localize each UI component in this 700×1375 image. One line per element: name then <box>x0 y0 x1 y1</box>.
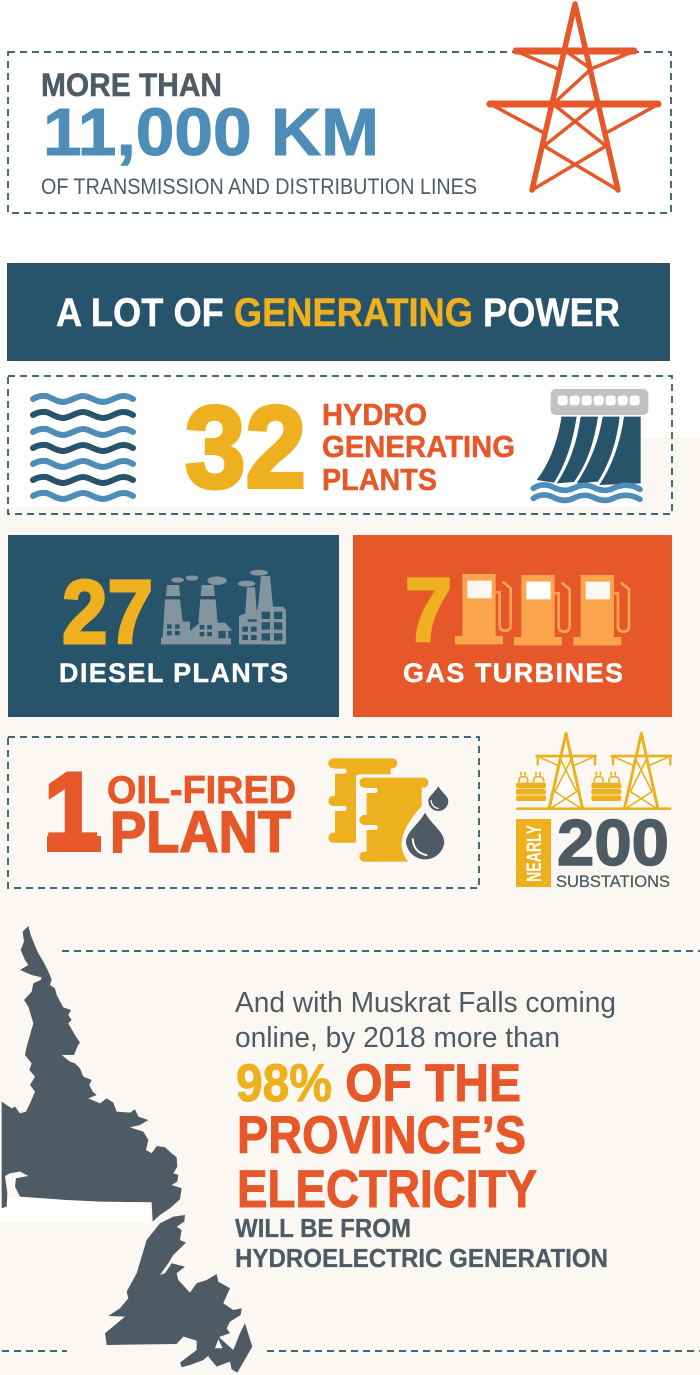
map: Newfoundland and Labrador <box>2 926 252 1373</box>
text: hydro generating plants: HYDRO <box>322 397 427 432</box>
number: 1: 1 <box>44 752 98 868</box>
panel: diesel plants <box>8 535 339 717</box>
text: hydro generating plants: GENERATING <box>322 429 515 464</box>
heading: generating power: A LOT OF GENERATING POWER <box>56 291 620 335</box>
headline: 98% of the province's electricity: PROVINCE’S <box>237 1106 526 1165</box>
icon: oil barrels and drops <box>328 758 448 862</box>
icon: fuel pumps <box>455 574 629 645</box>
tag: nearly: NEARLY <box>523 825 546 882</box>
text: and with Muskrat Falls coming online: online, by 2018 more than <box>235 1022 560 1054</box>
text: hydro generating plants <box>322 397 515 497</box>
panel: oil-fired plant <box>8 737 479 888</box>
label: gas turbines: GAS TURBINES <box>403 658 623 688</box>
text: will be from hydroelectric generation: HYDROELECTRIC GENERATION <box>235 1243 608 1273</box>
panel: muskrat falls <box>0 926 700 1373</box>
headline: 98% of the province's electricity: ELECTRICITY <box>237 1160 537 1219</box>
number: 200: 200 <box>557 806 669 879</box>
headline: 98% of the province's electricity: 98% OF THE <box>236 1054 521 1113</box>
text: and with Muskrat Falls coming online: And with Muskrat Falls coming <box>235 987 616 1019</box>
text: of transmission and distribution lines: OF TRANSMISSION AND DISTRIBUTION LINES <box>41 174 477 199</box>
banner: a lot of generating power <box>7 263 670 361</box>
number: 7: 7 <box>405 561 452 661</box>
number: 27: 27 <box>62 563 153 663</box>
big number: 11,000 km: 11,000 KM <box>43 95 379 170</box>
label: substations: SUBSTATIONS <box>556 872 670 891</box>
text: and with Muskrat Falls coming online <box>235 987 616 1054</box>
text: will be from hydroelectric generation <box>235 1213 608 1273</box>
panel: gas turbines <box>353 535 672 717</box>
panel: transmission lines <box>8 4 671 213</box>
icon: factories <box>161 570 286 644</box>
number: 32: 32 <box>185 382 306 512</box>
icon: transmission tower <box>490 4 658 190</box>
text: oil-fired: OIL-FIRED <box>107 769 296 812</box>
text: will be from hydroelectric generation: WILL BE FROM <box>235 1213 411 1243</box>
icon: hydro dam <box>533 389 648 500</box>
label: diesel plants: DIESEL PLANTS <box>59 658 288 688</box>
panel: nearly 200 substations <box>516 733 671 891</box>
icon: substation towers <box>516 733 671 809</box>
heading: more than: MORE THAN <box>41 67 222 103</box>
icon: water waves <box>33 396 133 499</box>
text: plant: PLANT <box>110 800 291 865</box>
headline: 98% of the province's electricity <box>236 1054 537 1219</box>
panel: hydro generating plants <box>8 376 672 514</box>
text: hydro generating plants: PLANTS <box>322 462 437 497</box>
tag: nearly <box>516 819 551 887</box>
